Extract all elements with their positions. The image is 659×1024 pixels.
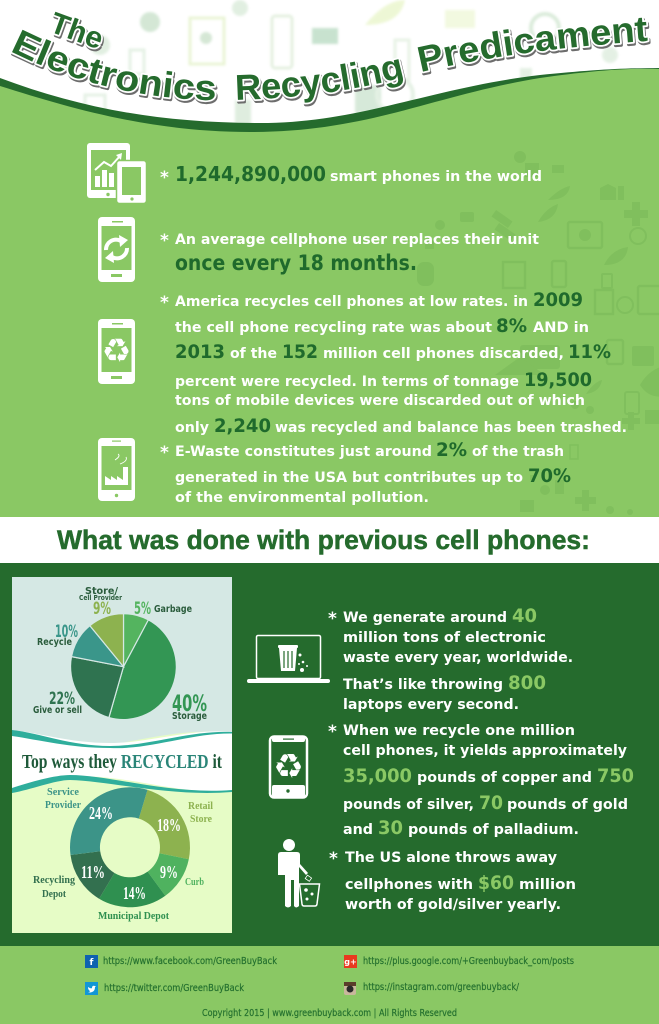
link: instagram: https://instagram.com/greenbuyback/ [363,982,520,993]
title [11,7,651,106]
icon: google plus: g+ [344,958,357,966]
text: 40 million tons: * [328,609,337,629]
icon: instagram [344,982,356,995]
text: smart phone count: smart phones in the world [330,169,542,185]
pie chart: previous phones [71,614,176,720]
panel: charts [12,577,232,933]
text: US throws away gold: The US alone throws away [345,850,558,866]
icon: facebook: f [90,958,94,968]
link: google plus: https://plus.google.com/+Greenbuyback_com/posts [363,956,574,967]
text: 40 million tons: We generate around [343,610,507,626]
text: America recycling rates: tons of mobile devices were discarded out of which [175,393,585,409]
icon: person throwing phone into bin [278,839,320,908]
text: smart phone count: * [160,168,169,188]
pie labels: 10% [55,622,78,642]
donut chart: recycling ways: 11% [81,862,105,882]
text: America recycling rates: was recycled and balance has been trashed. [275,420,627,436]
icon: phone with recycling symbol, dark panel: ♻ [273,747,304,787]
icon: phone with recycling symbol [98,319,135,384]
text: US throws away gold: $60 [478,872,514,894]
icon: google plus [344,955,357,968]
pie labels: Store/ [85,586,118,597]
text: America recycling rates: 2009 [533,289,583,311]
title: The [46,7,108,56]
text: America recycling rates: million cell phones discarded, [323,346,564,362]
text: recycling yields: cell phones, it yields approximately [343,743,628,759]
donut labels: Retail [188,800,213,812]
text: e-waste share: E-Waste constitutes just around [175,444,432,460]
pie labels: Give or sell [33,705,82,716]
text: recycling yields: 30 [378,817,403,839]
text: America recycling rates: AND in [533,320,589,336]
text: America recycling rates: percent were recycled. In terms of tonnage [175,374,519,390]
text: 40 million tons: 800 [508,672,546,694]
title: Electronics [11,30,218,104]
heading: previous cell phones: What was done with previous cell phones: [57,525,590,555]
text: America recycling rates: 2,240 [214,415,271,437]
text: America recycling rates: only [175,420,210,436]
pie labels: Recycle [37,637,72,648]
text: e-waste share: of the trash [472,444,564,460]
text: e-waste share: 70% [528,465,571,487]
donut labels: Service [47,786,79,798]
text: recycling yields: and [343,822,373,838]
copyright: Copyright 2015 | www.greenbuyback.com | All Rights Reserved [202,1008,457,1019]
text: 40 million tons: 40 [512,605,537,627]
icon: phone with factory [98,438,135,501]
text: recycling yields: pounds of palladium. [408,822,579,838]
text: US throws away gold: million [519,877,576,893]
text: e-waste share [160,439,571,506]
white heading band [0,517,659,563]
faint background icons [417,151,659,515]
donut labels: Provider [45,799,81,811]
text: replacement rate: An average cellphone user replaces their unit [175,232,539,248]
text: replacement rate: once every 18 months. [175,251,417,275]
pie labels: 5% [134,599,151,619]
text: recycling yields: 70 [479,792,503,814]
text: America recycling rates: 2013 [175,341,225,363]
text: America recycling rates: America recycles cell phones at low rates. in [175,294,528,310]
donut labels: Curb [185,876,204,888]
icon: phone with refresh arrows [98,217,135,282]
text: smart phone count: 1,244,890,000 [175,162,326,186]
pie labels: Storage [172,711,207,722]
header background [0,0,659,140]
icon: phone with recycling symbol: ♻ [102,331,131,370]
text: recycling yields: pounds of gold [507,797,628,813]
text: America recycling rates: * [160,293,169,313]
text: 40 million tons: waste every year, worldwide. [343,650,573,666]
pie labels [33,586,207,722]
header wave [0,68,659,132]
icon: phone with recycling symbol, dark panel [270,736,307,798]
text: America recycling rates: the cell phone recycling rate was about [175,320,492,336]
text: e-waste share: * [160,443,169,463]
text: US throws away gold [329,849,576,913]
text: e-waste share: generated in the USA but contributes up to [175,470,523,486]
text: e-waste share: 2% [436,439,467,461]
text: America recycling rates: 11% [568,341,611,363]
text: recycling yields: pounds of copper and [417,770,592,786]
donut chart: recycling ways: 18% [157,815,181,835]
text: replacement rate: * [160,231,169,251]
text: recycling yields: When we recycle one million [343,723,575,739]
text: America recycling rates: of the [230,346,277,362]
icon: tablet and phone chart [87,143,146,204]
text: smart phone count [160,162,542,188]
text: recycling yields: 35,000 [343,765,412,787]
text: replacement rate [160,231,539,275]
pie labels: 40% [172,692,207,717]
pie labels: Garbage [154,604,192,615]
text: e-waste share: of the environmental pollution. [175,490,429,506]
text: 40 million tons: laptops every second. [343,697,519,713]
title: Recycling [236,58,406,106]
donut labels: Recycling [33,874,75,886]
dark green panel [0,563,659,946]
text: US throws away gold: worth of gold/silver yearly. [345,897,561,913]
pie labels: 9% [93,599,111,619]
donut labels: Store [190,813,212,825]
text: 40 million tons: million tons of electronic [343,630,546,646]
donut chart: recycling ways: 9% [160,862,178,882]
text: recycling yields: pounds of silver, [343,797,474,813]
pie labels: Cell Provider [79,594,122,602]
donut labels [33,786,213,922]
text: 40 million tons: That’s like throwing [343,677,503,693]
icon: laptop with trash can [247,636,330,683]
text: America recycling rates [160,289,627,437]
text: recycling yields [328,722,634,839]
text: America recycling rates: 19,500 [524,369,592,391]
text: recycling yields: * [328,722,337,742]
donut chart: recycling ways: 14% [123,883,146,903]
text: US throws away gold: cellphones with [345,877,473,893]
donut chart: recycling ways [70,787,190,907]
text: America recycling rates: 8% [496,315,527,337]
pie labels: 22% [49,689,75,709]
donut chart: recycling ways: 24% [89,803,113,823]
donut labels: Depot [42,888,66,900]
green top section [0,69,659,518]
text: America recycling rates: 152 [282,341,318,363]
text: US throws away gold: * [329,849,338,869]
title: Predicament [418,18,651,76]
footer [0,946,659,1024]
icon: twitter [85,982,98,995]
text: recycling yields: 750 [597,765,634,787]
text: 40 million tons [328,605,573,713]
link: twitter: https://twitter.com/GreenBuyBack [104,983,244,994]
icon: facebook [85,955,98,968]
subheading: top ways recycled: Top ways they RECYCLED it [22,751,222,773]
link: facebook: https://www.facebook.com/GreenBuyBack [103,956,277,967]
donut labels: Municipal Depot [98,910,169,922]
